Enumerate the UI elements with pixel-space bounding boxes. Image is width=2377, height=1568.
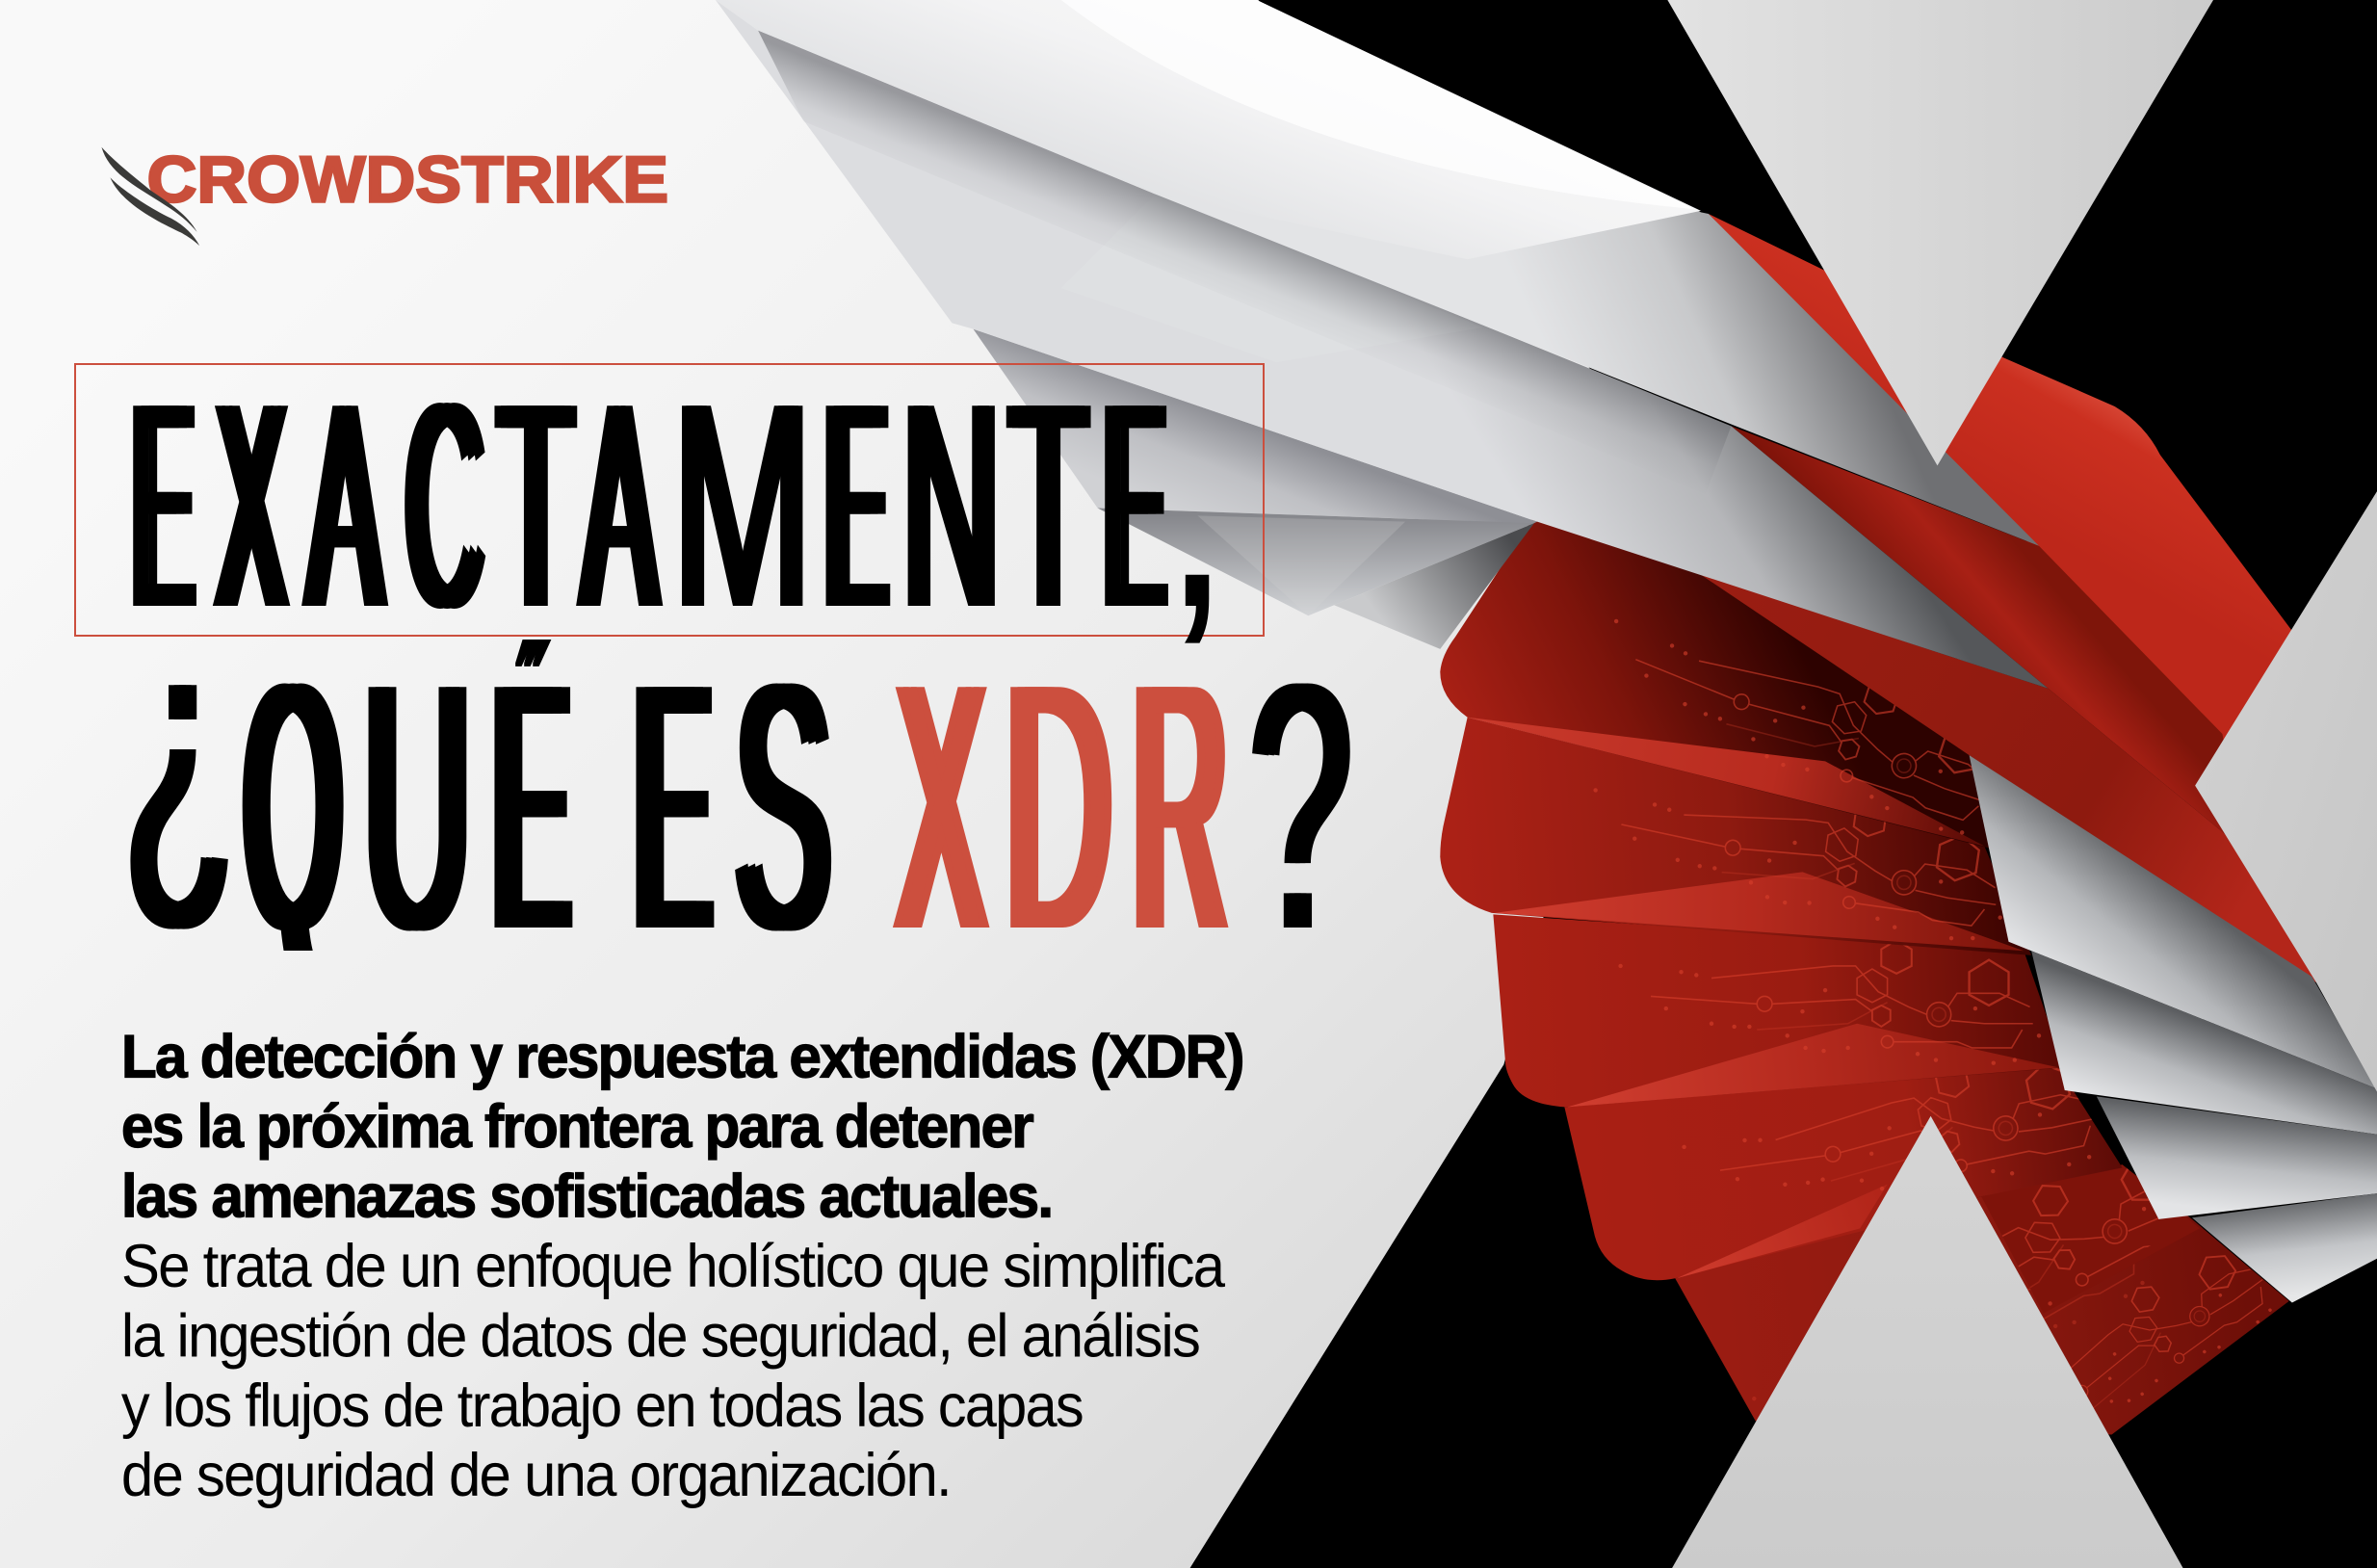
title line 1: N [902,343,1001,667]
body paragraph: Se trata de un enfoque holístico que simplifica [121,1233,1226,1300]
title line 1: , [1162,343,1231,667]
black X background [1190,0,2377,1568]
lower folds [973,329,1537,525]
grey X wedges [1667,0,2377,1568]
body paragraph: es la próxima frontera para detener [121,1093,1033,1161]
title line 1: T [498,343,574,667]
title line 2: X [898,611,984,1002]
title line 1: C [406,343,483,667]
title line 2: ¿ [124,553,235,944]
title line 1: M [672,343,813,667]
lower red band [1701,575,2316,982]
title line 1: E [826,343,886,667]
title line 1: E [134,343,193,667]
blade 2 [1440,718,2031,955]
title line 1: E [1106,343,1164,667]
title line 2: Q [245,611,342,1002]
body paragraph: y los flujos de trabajo en todas las capas [121,1372,1083,1440]
title line 2: ? [1250,611,1351,1002]
body paragraph: La detección y respuesta extendidas (XDR) [121,1024,1243,1091]
title frame [74,363,1265,637]
body paragraph: de seguridad de una organización. [121,1442,951,1509]
middle ribbon [716,0,2048,689]
red ribbon bands [1701,214,2316,982]
icon: falcon swooshes [101,147,199,246]
title line 2: R [1134,611,1227,1002]
body paragraph: las amenazas sofisticadas actuales. [121,1163,1052,1231]
title line 1 [130,343,1350,930]
title line 2: D [1006,611,1111,1002]
title line 2: U [364,611,471,1002]
blade 5 [1675,1164,2289,1435]
title line 1: X [218,343,285,667]
body paragraph: la ingestión de datos de seguridad, el análisis [121,1302,1199,1370]
title line 2: É [494,611,568,1002]
title line 1: A [583,343,657,667]
logo [101,144,668,246]
top ribbon [716,0,2039,546]
wordmark: CROWDSTRIKE [147,144,668,216]
bright red band [1709,214,2292,803]
title line 2: E [636,611,710,1002]
red circuit fan blades [1440,518,2289,1500]
blade 4b dark section [1982,1164,2200,1306]
title line 2 [124,553,1351,1002]
blade 1 [1440,518,2024,849]
white paper ribbons [716,0,2048,689]
dark red band [1731,426,2243,849]
title line 1: A [308,343,382,667]
body paragraph [121,1024,1243,1509]
blade 3 [1493,914,2065,1107]
blade 4 [1564,1067,2123,1281]
title line 1: T [1009,343,1088,667]
title line 2: S [736,611,830,1002]
right paper fan [1970,755,2377,1302]
